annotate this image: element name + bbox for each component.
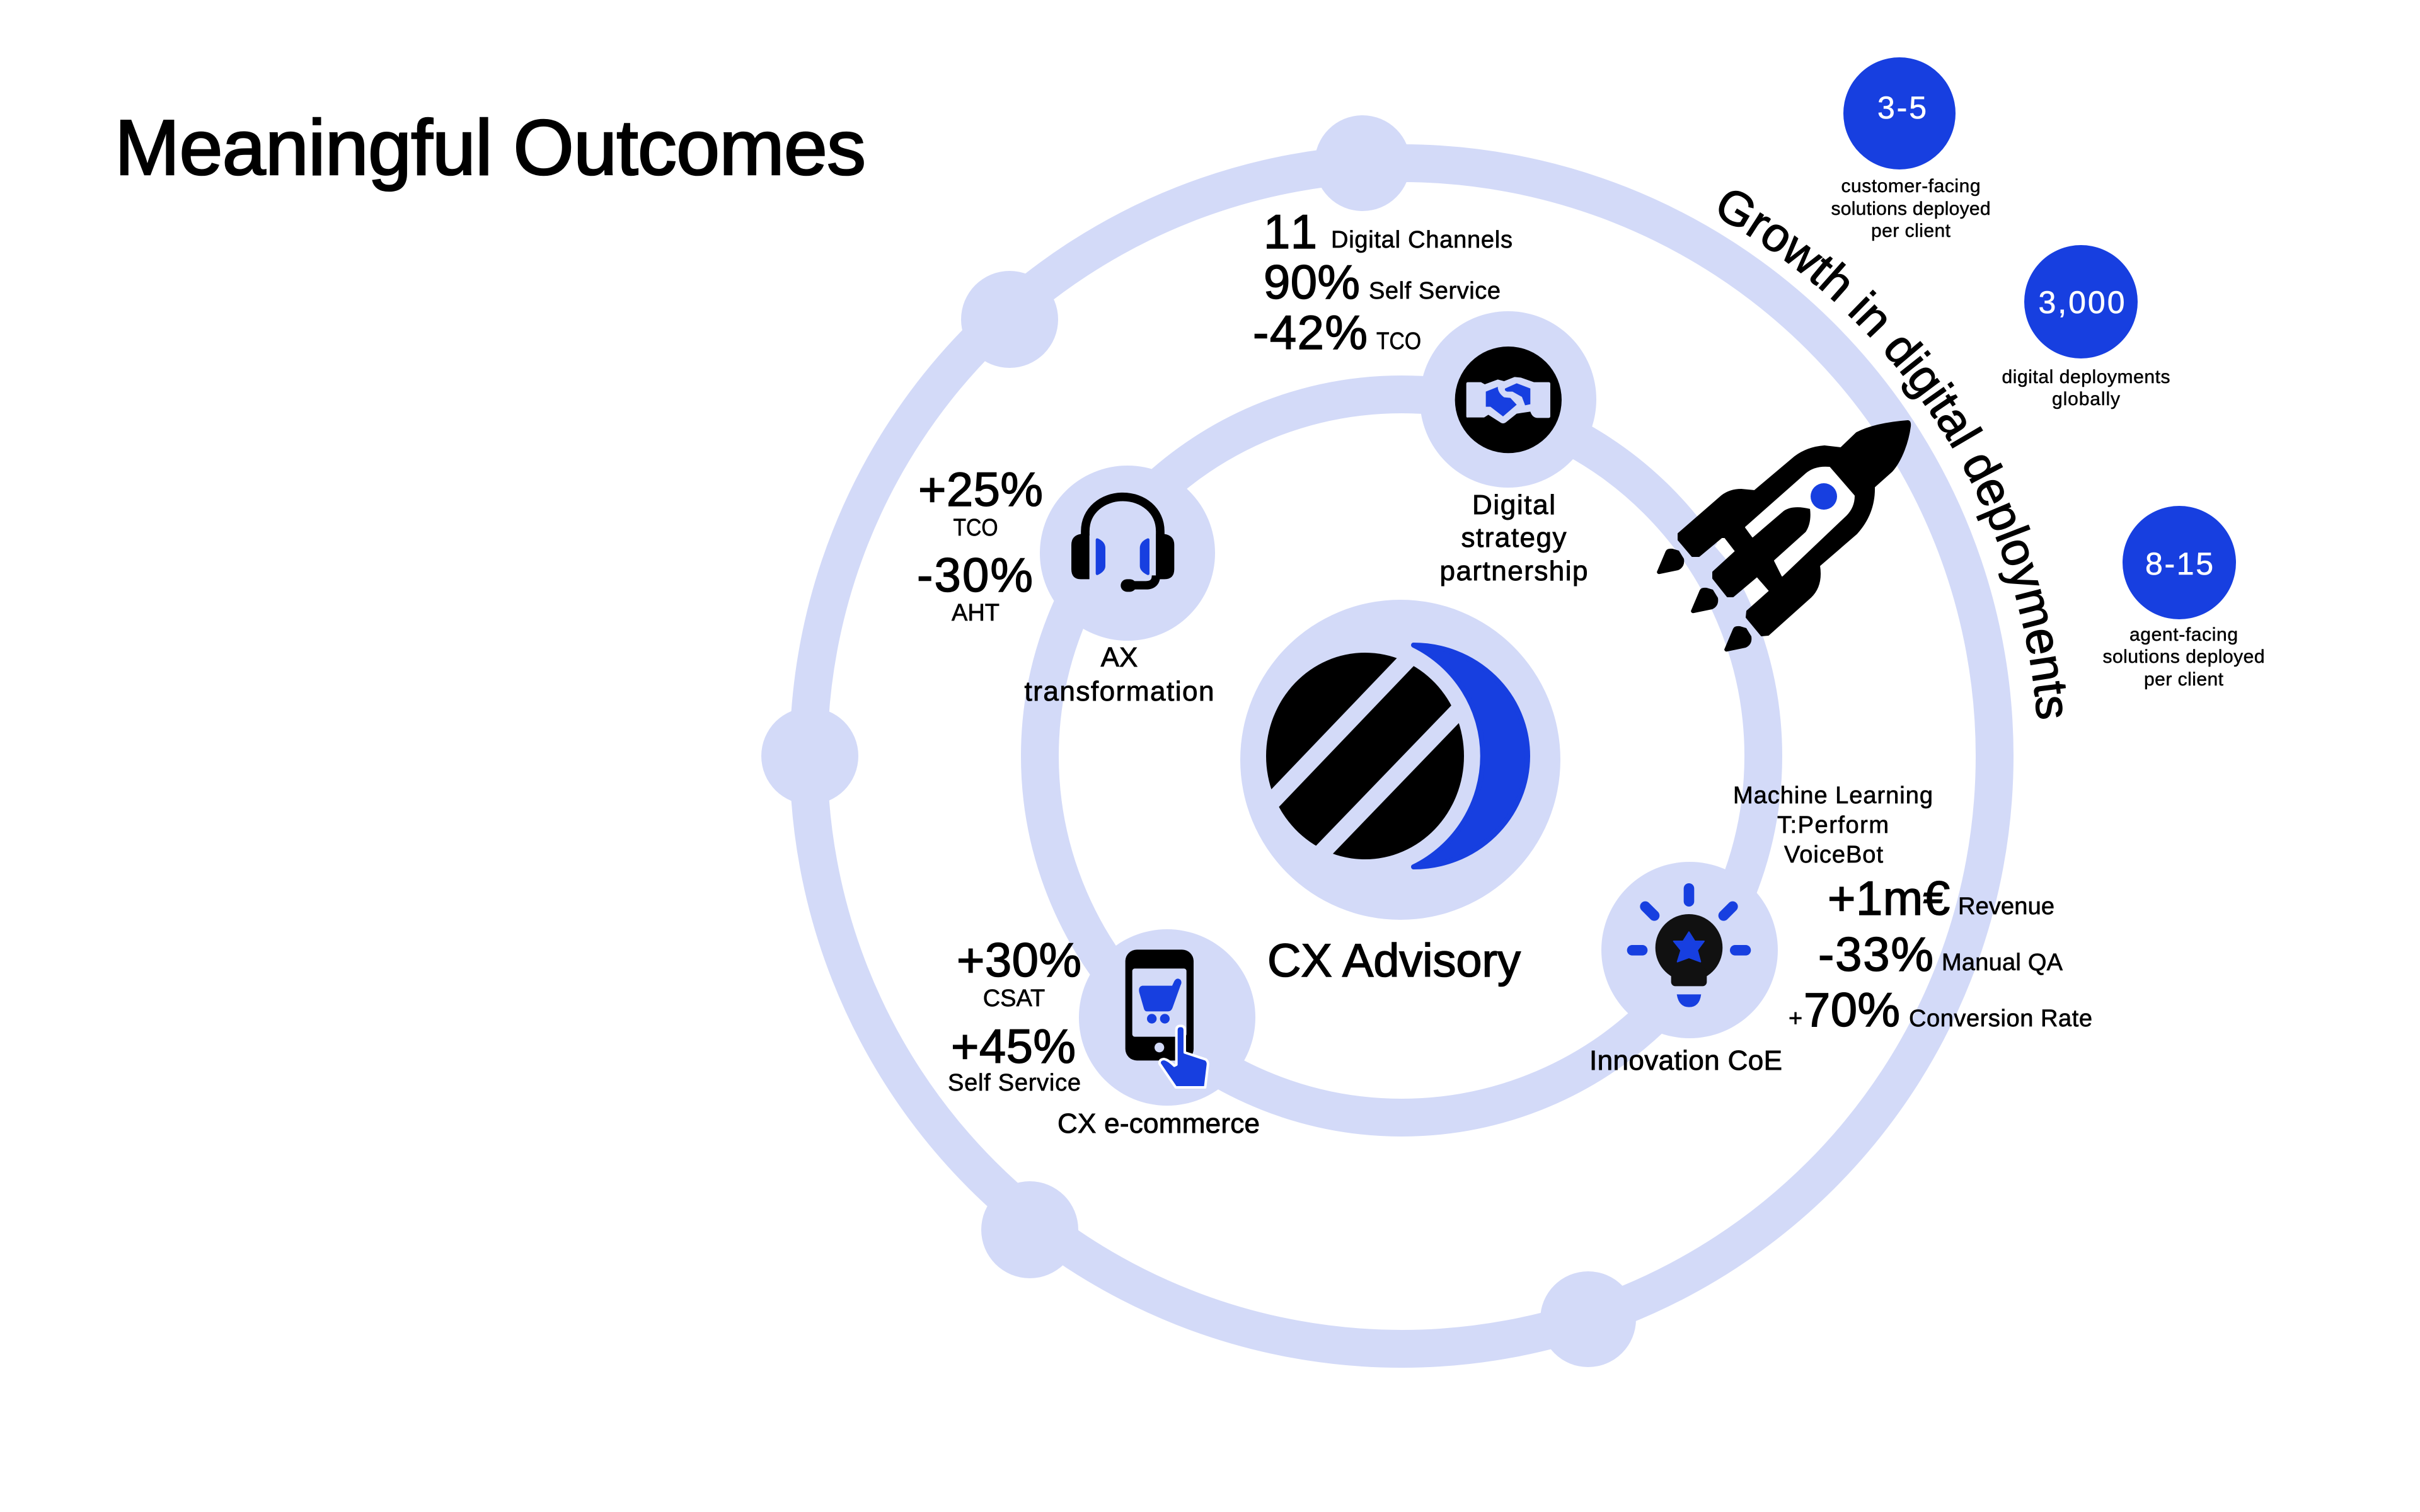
stats: digital strategy: Self Service — [1369, 278, 1501, 304]
label: digital strategy partnership: Digital — [1472, 490, 1555, 520]
metric: 3-5 customer-facing solutions — [1831, 57, 1990, 241]
icon: handshake — [1455, 346, 1562, 453]
label: machine learning items: T:Perform — [1777, 812, 1889, 839]
label: machine learning items — [1733, 782, 1933, 868]
stats: CX e-commerce — [948, 934, 1081, 1096]
stats: CX e-commerce: CSAT — [983, 985, 1045, 1012]
stats: innovation: Revenue — [1958, 893, 2054, 920]
metric: 3-5 customer-facing solutions: per client — [1871, 220, 1951, 241]
stats: digital strategy: -42% — [1253, 306, 1368, 360]
stats: innovation: +1m€ — [1828, 872, 1950, 925]
metric: 8-15 agent-facing solutions: per client — [2144, 669, 2224, 690]
label: digital strategy partnership: strategy — [1461, 522, 1567, 553]
stats: AX transformation: -30% — [917, 549, 1033, 602]
metric: 3-5 customer-facing solutions: 3-5 — [1877, 90, 1927, 125]
stats: innovation — [1789, 872, 2092, 1037]
metric: 3,000 digital deployments: digital deployments — [2002, 367, 2170, 387]
label: machine learning items: VoiceBot — [1784, 842, 1883, 868]
stats: digital strategy: 90% — [1264, 256, 1360, 309]
stats: innovation: Conversion Rate — [1909, 1005, 2092, 1032]
metric: 3,000 digital deployments: 3,000 — [2038, 285, 2125, 320]
icon: light bulb — [1632, 888, 1746, 1007]
icon: rocket — [1657, 421, 1910, 651]
stats: innovation: 70% — [1804, 983, 1900, 1037]
center label: CX Advisory — [1267, 934, 1521, 987]
metric: 8-15 agent-facing solutions: agent-facing — [2129, 624, 2238, 645]
label: digital strategy partnership — [1439, 490, 1588, 587]
metric: 3,000 digital deployments — [2002, 245, 2170, 410]
stats: digital strategy — [1253, 205, 1512, 360]
label: digital strategy partnership: partnership — [1439, 556, 1588, 587]
curved heading: Growth in digital deployments — [1719, 190, 2066, 719]
label: AX transformation — [1025, 642, 1214, 707]
icon: headset — [1071, 497, 1174, 592]
stats: CX e-commerce: Self Service — [948, 1070, 1081, 1096]
stats: AX transformation: TCO — [953, 515, 998, 541]
stats: AX transformation: AHT — [952, 600, 1000, 626]
title: Meaningful Outcomes — [115, 105, 866, 192]
center logo disc — [1240, 600, 1560, 920]
stats: digital strategy: 11 — [1264, 205, 1317, 259]
label: CX e-commerce: CX e-commerce — [1057, 1108, 1260, 1139]
stats: digital strategy: Digital Channels — [1331, 227, 1512, 253]
label: innovation CoE: Innovation CoE — [1589, 1045, 1782, 1076]
stats: CX e-commerce: +45% — [951, 1020, 1076, 1074]
diagram: inner orbit ring with service nodes — [1040, 311, 1778, 1118]
diagram: outer orbit ring with nodes — [761, 115, 1995, 1367]
label: AX transformation: AX — [1101, 642, 1138, 673]
label: AX transformation: transformation — [1025, 676, 1214, 707]
stats: digital strategy: TCO — [1376, 328, 1421, 355]
metric: 3-5 customer-facing solutions: solutions deployed — [1831, 198, 1990, 219]
icon: phone with cart — [1126, 949, 1208, 1087]
metric: 3-5 customer-facing solutions: customer-facing — [1841, 176, 1980, 197]
metric: 3,000 digital deployments: globally — [2052, 389, 2120, 410]
stats: innovation: -33% — [1818, 928, 1933, 982]
metric: 8-15 agent-facing solutions: 8-15 — [2145, 546, 2213, 581]
stats: innovation: Manual QA — [1942, 949, 2063, 976]
metric: 8-15 agent-facing solutions — [2102, 506, 2265, 690]
metric: 8-15 agent-facing solutions: solutions deployed — [2102, 646, 2265, 667]
stats: innovation: + — [1789, 1005, 1802, 1032]
stats: AX transformation — [917, 463, 1043, 626]
stats: CX e-commerce: +30% — [957, 934, 1081, 987]
label: machine learning items: Machine Learning — [1733, 782, 1933, 809]
stats: AX transformation: +25% — [918, 463, 1043, 517]
